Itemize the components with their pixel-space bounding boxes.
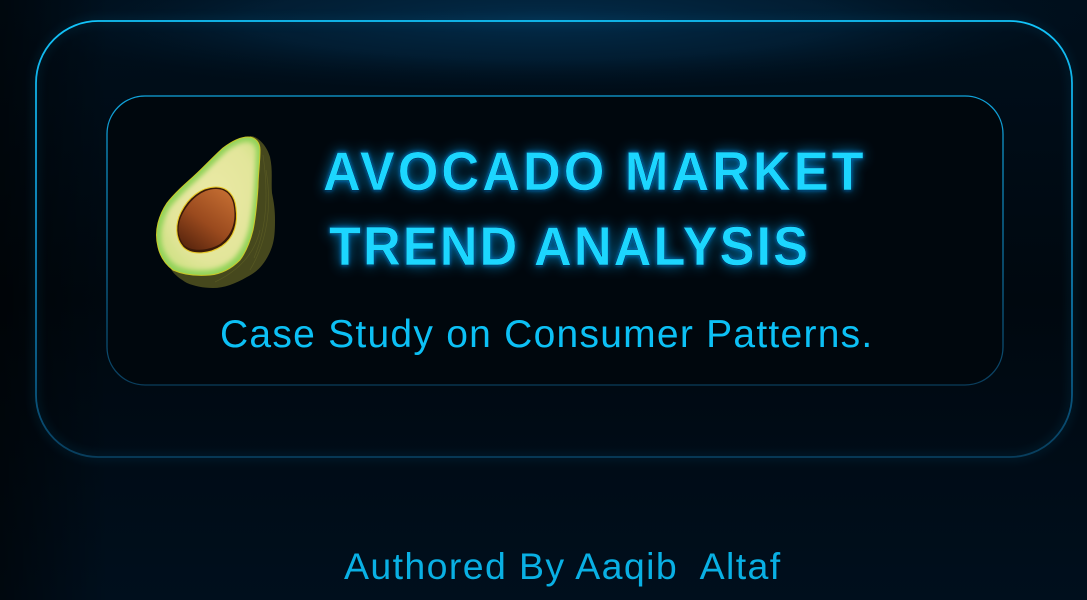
title: TREND ANALYSIS	[329, 216, 810, 277]
avocado seed	[177, 187, 237, 253]
author credit: Authored By Aaqib Altaf	[344, 545, 782, 587]
panel: outer frame	[36, 21, 1072, 457]
icon: avocado	[156, 136, 275, 288]
avocado yellow rim	[156, 137, 260, 275]
avocado flesh	[161, 142, 256, 270]
title: AVOCADO MARKET	[323, 141, 867, 202]
subtitle: Case Study on Consumer Patterns.	[220, 313, 873, 356]
avocado skin texture	[215, 155, 269, 282]
panel: inner frame	[107, 96, 1003, 385]
title: AVOCADO MARKET	[323, 141, 867, 202]
title: TREND ANALYSIS	[329, 216, 810, 277]
title: TREND ANALYSIS	[329, 216, 810, 277]
title: AVOCADO MARKET	[323, 141, 867, 202]
title	[323, 141, 867, 277]
avocado skin	[170, 136, 275, 288]
